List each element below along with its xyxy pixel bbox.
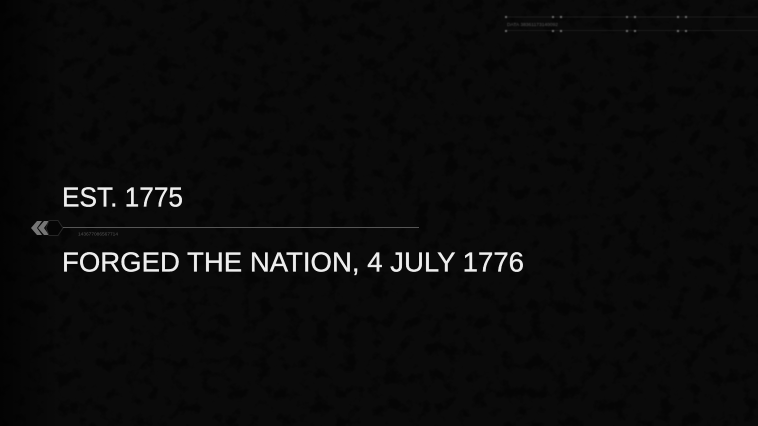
divider marker with chevrons and rule — [31, 220, 419, 236]
icon: double chevron — [31, 221, 49, 235]
HUD data readout, top right: DATA 38361173140092 — [507, 22, 559, 27]
heading: forged the nation: FORGED THE NATION, 4 JULY 1776 — [62, 246, 524, 278]
icon: dark hexagon badge — [46, 220, 63, 236]
rule line — [63, 226, 419, 228]
heading: established date: EST. 1775 — [62, 182, 183, 212]
small serial number: 143677086567714 — [78, 232, 119, 236]
